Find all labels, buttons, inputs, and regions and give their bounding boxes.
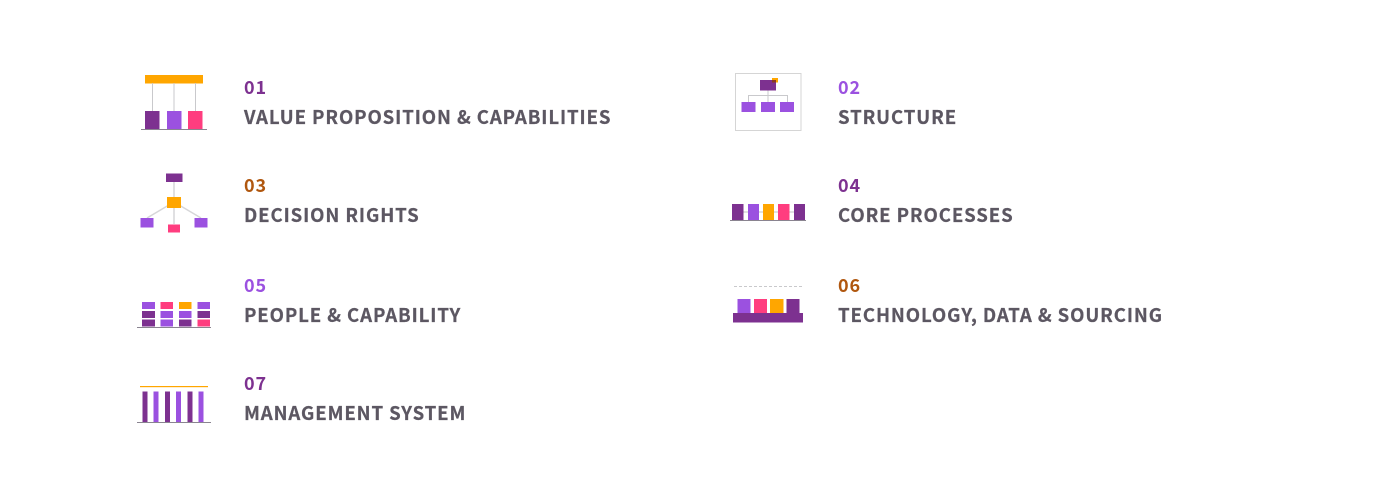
item 06 text: TECHNOLOGY, DATA & SOURCING	[838, 301, 1163, 328]
item 07 text: 07	[244, 370, 267, 396]
item 03 text	[244, 172, 420, 228]
icon 04: core processes	[730, 204, 806, 220]
item 01 text	[243, 74, 611, 130]
item 06 text: 06	[838, 272, 861, 298]
item 04 text: CORE PROCESSES	[838, 201, 1014, 228]
icon 03: decision rights	[140, 174, 208, 232]
item 05 text	[244, 272, 461, 328]
item 06 text	[838, 272, 1163, 328]
item 05 text: 05	[244, 272, 267, 298]
item 04 text: 04	[838, 172, 861, 198]
item 02 text: 02	[838, 74, 861, 100]
item 07 text: MANAGEMENT SYSTEM	[244, 399, 466, 426]
icon 05: people and capability	[137, 302, 211, 328]
item 01 text: 01	[244, 74, 267, 100]
icon 02: structure	[736, 74, 801, 130]
item 05 text: PEOPLE & CAPABILITY	[244, 301, 461, 328]
icon 07: management system	[137, 386, 211, 422]
item 03 text: DECISION RIGHTS	[244, 201, 420, 228]
item 02 text	[838, 74, 957, 130]
item 01 text: VALUE PROPOSITION & CAPABILITIES	[243, 103, 611, 130]
item 03 text: 03	[244, 172, 267, 198]
item 02 text: STRUCTURE	[838, 103, 957, 130]
item 07 text	[244, 370, 466, 426]
icon 01: value proposition	[141, 75, 207, 130]
item 04 text	[838, 172, 1014, 228]
icon 06: technology, data and sourcing	[733, 286, 803, 322]
